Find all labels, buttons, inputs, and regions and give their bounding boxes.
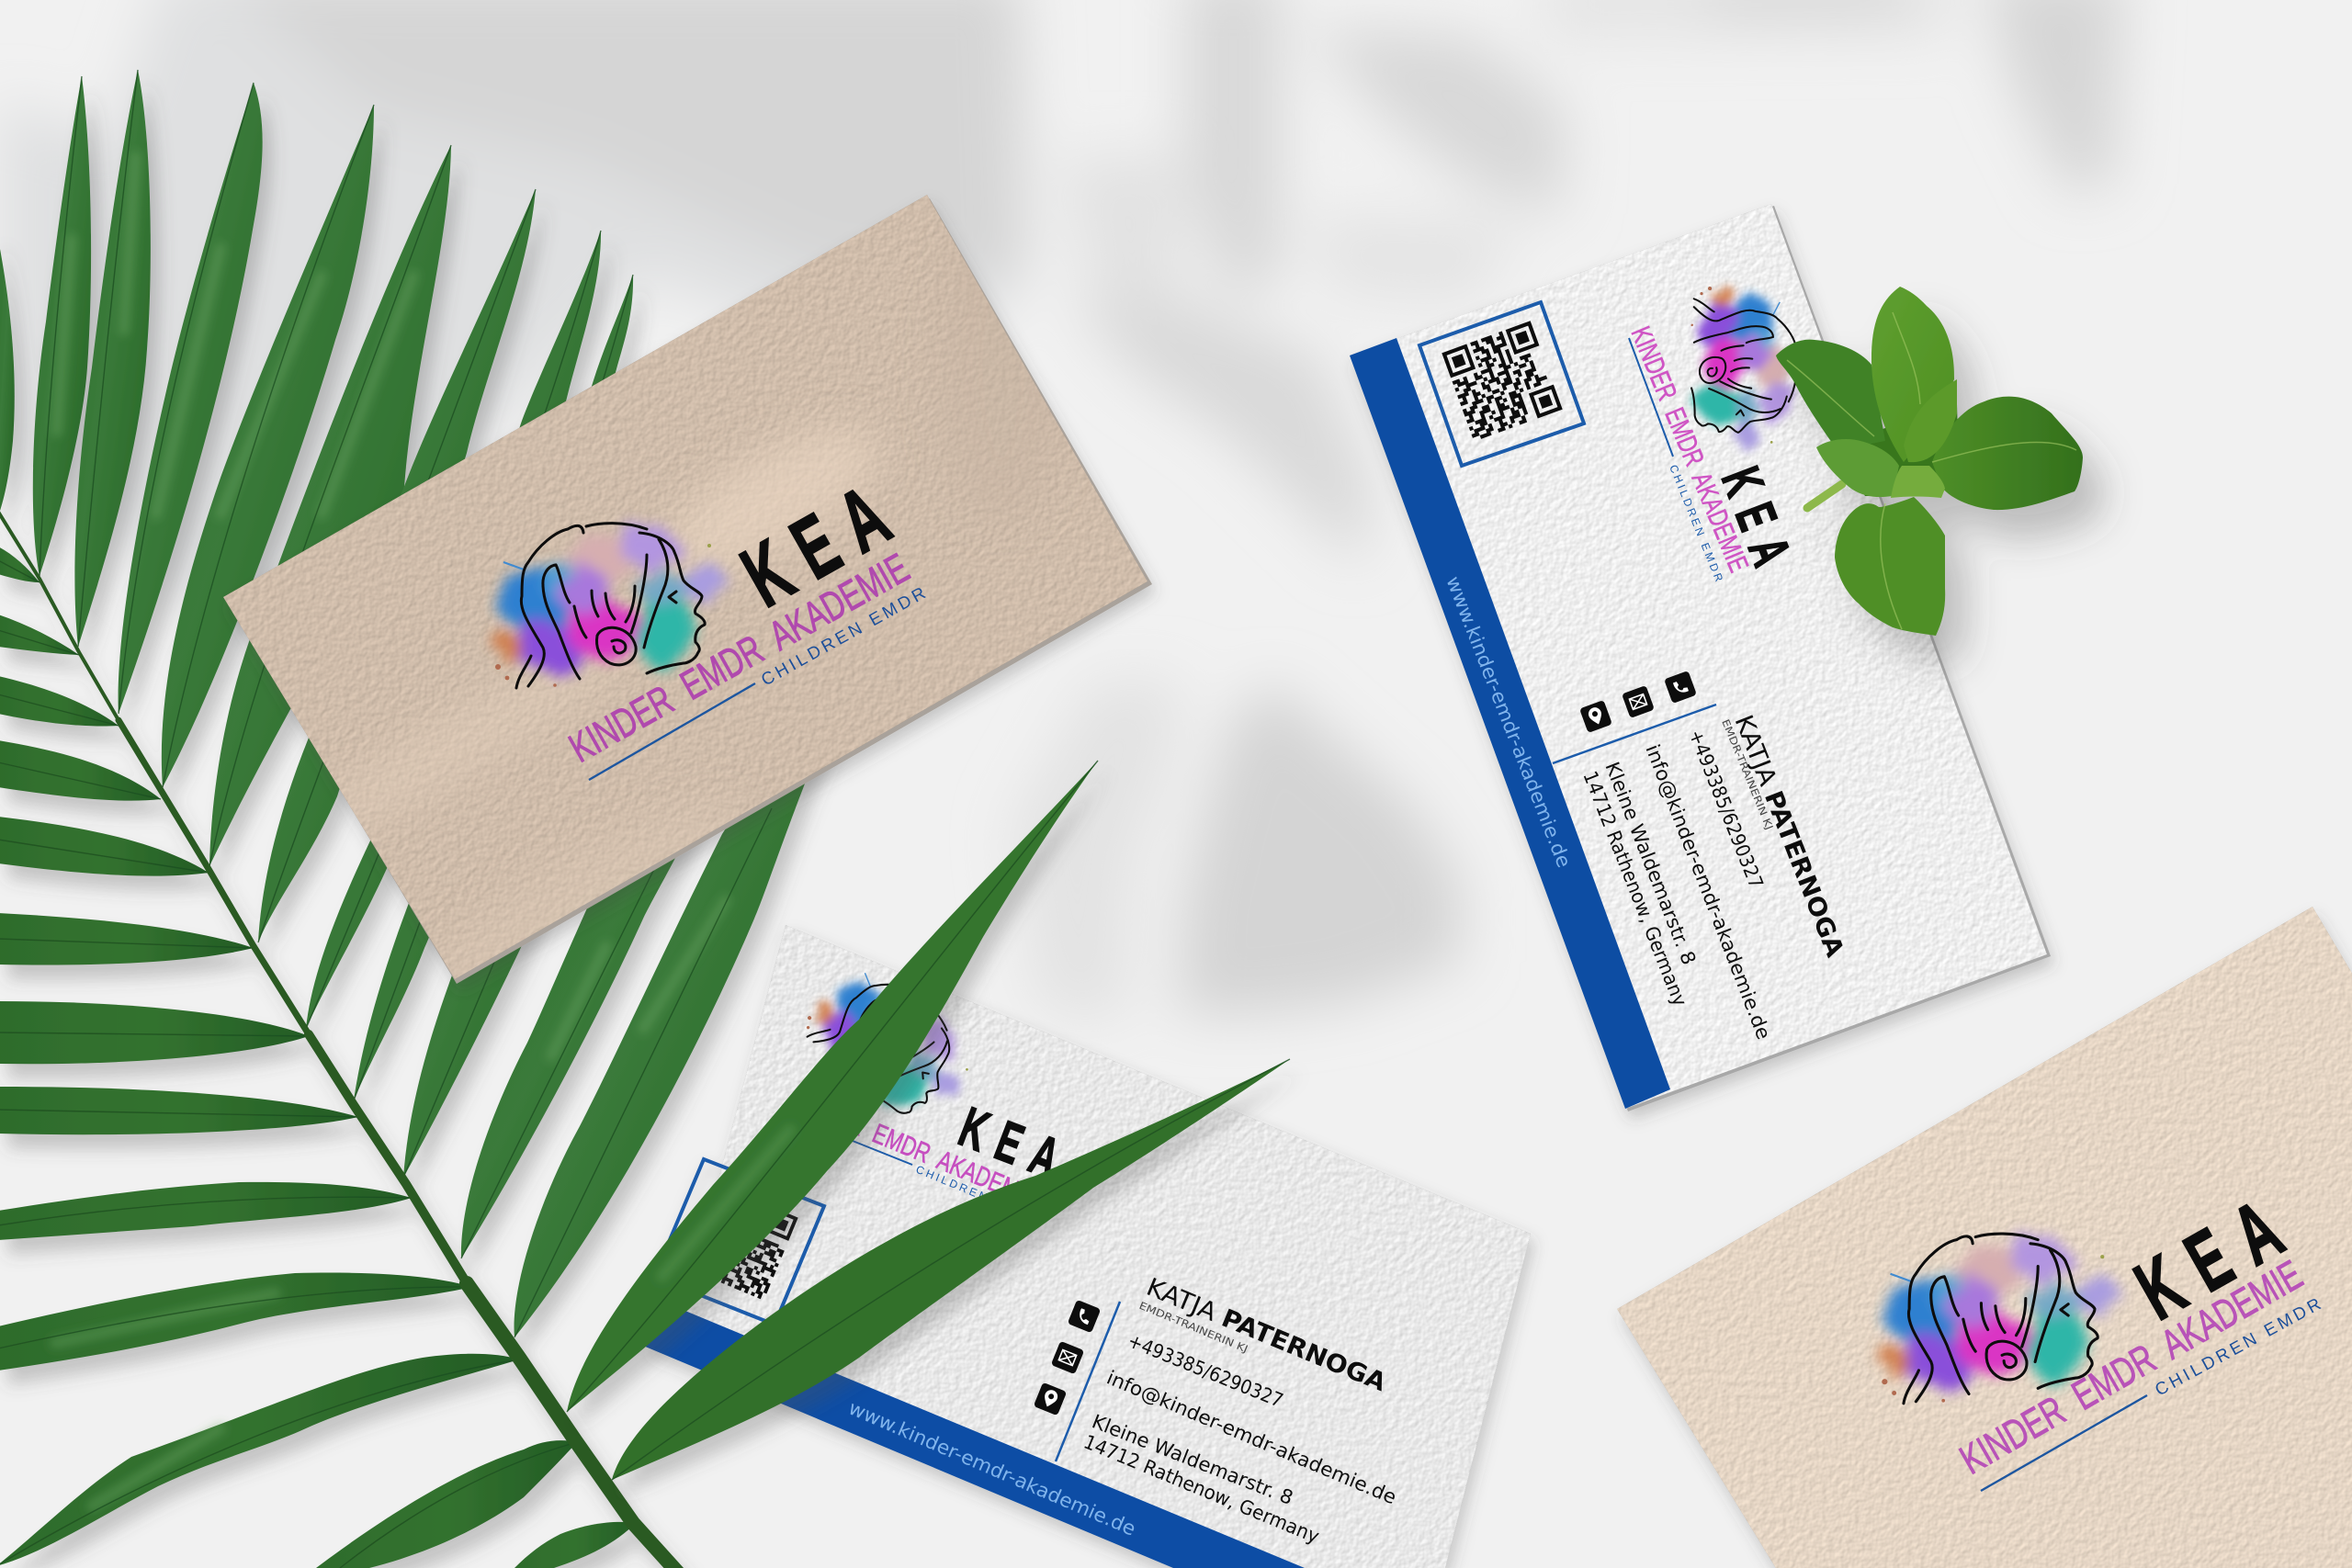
blue band xyxy=(1350,338,1670,1109)
leaflet one xyxy=(567,761,1098,1412)
foliage shadows on surface xyxy=(0,0,2124,1020)
blue band xyxy=(643,1309,1305,1568)
contact text: info@kinder-emdr-akademie.de xyxy=(1103,1367,1399,1508)
contact text: KATJA PATERNOGA xyxy=(1728,711,1849,961)
logo on tan card: KINDER EMDR AKADEMIE xyxy=(561,544,917,772)
long leaflets over bottom card xyxy=(567,761,1290,1480)
upper leaflets xyxy=(33,70,827,1337)
leaf right xyxy=(1932,397,2083,510)
divider xyxy=(1056,1302,1120,1461)
qr code xyxy=(1442,321,1563,442)
leaf highlights xyxy=(55,156,726,1506)
logo on tan card: KEA xyxy=(726,457,920,626)
logo on tan card: CHILDREN EMDR xyxy=(758,584,929,690)
qr frame xyxy=(654,1159,824,1325)
logo on right card xyxy=(1625,284,1808,587)
logo on bottom right card: CHILDREN EMDR xyxy=(2152,1295,2324,1400)
logo on right card: KEA xyxy=(1710,459,1808,587)
contact text: EMDR-TRAINERIN KJ xyxy=(1137,1300,1250,1355)
leaf small left xyxy=(1816,439,1899,497)
card edge xyxy=(1351,206,2051,1111)
contact text: +493385/6290327 xyxy=(1125,1329,1286,1412)
website url: www.kinder-emdr-akademie.de xyxy=(1442,573,1575,871)
contact text xyxy=(1080,1273,1399,1548)
card: tan back, top left xyxy=(223,195,1152,1032)
contact text: +493385/6290327 xyxy=(1684,727,1768,892)
contact text: 14712 Rathenow, Germany xyxy=(1578,768,1691,1010)
logo on tan card xyxy=(494,457,929,780)
logo on right card: CHILDREN EMDR xyxy=(1667,463,1725,584)
contact text: 14712 Rathenow, Germany xyxy=(1080,1430,1322,1548)
contact text: EMDR-TRAINERIN KJ xyxy=(1719,717,1775,831)
contact text: info@kinder-emdr-akademie.de xyxy=(1641,741,1775,1043)
contact icons xyxy=(1579,671,1697,733)
stem xyxy=(1807,484,1842,508)
logo on bottom card: CHILDREN EMDR xyxy=(914,1163,1035,1223)
basil sprig xyxy=(1776,287,2083,636)
qr code xyxy=(681,1183,798,1301)
leaf left xyxy=(1776,340,1885,450)
contact icons xyxy=(1034,1300,1101,1416)
leaf small front xyxy=(1891,466,1945,498)
card edge xyxy=(226,198,1152,984)
card surface xyxy=(1350,204,2047,1109)
light and shadow on card xyxy=(285,257,1057,978)
card surface xyxy=(643,925,1531,1568)
card: white front, bottom xyxy=(643,925,1531,1568)
card surface xyxy=(223,195,1148,979)
contact text: KATJA PATERNOGA xyxy=(1142,1273,1390,1397)
lower leaflets xyxy=(0,547,636,1568)
website url: www.kinder-emdr-akademie.de xyxy=(845,1397,1139,1540)
far left leaflet xyxy=(0,230,15,516)
logo on bottom right card: KEA xyxy=(2121,1173,2314,1338)
leaflet two xyxy=(612,1059,1290,1480)
contact text xyxy=(1578,711,1849,1043)
logo on bottom card: KEA xyxy=(951,1094,1080,1195)
logo on bottom card: KINDER EMDR AKADEMIE xyxy=(786,1085,1041,1213)
midribs xyxy=(0,70,772,1568)
palm frond xyxy=(0,70,827,1568)
divider xyxy=(1553,705,1716,763)
card surface xyxy=(1617,907,2352,1568)
qr frame xyxy=(1419,302,1584,466)
rachis xyxy=(0,512,684,1568)
leaf small centre xyxy=(1904,379,1957,462)
sprig centre shadow xyxy=(1838,404,1959,496)
veins xyxy=(1787,312,2076,629)
logo on right card: KINDER EMDR AKADEMIE xyxy=(1625,322,1754,577)
contact text: Kleine Waldemarstr. 8 xyxy=(1600,759,1700,968)
leaf bottom xyxy=(1835,497,1945,636)
card: tan back, bottom right xyxy=(1617,907,2352,1568)
contact text: Kleine Waldemarstr. 8 xyxy=(1089,1410,1296,1509)
leaf top xyxy=(1871,287,1954,462)
logo on bottom card xyxy=(786,951,1080,1223)
card: white front, right xyxy=(1350,204,2051,1111)
